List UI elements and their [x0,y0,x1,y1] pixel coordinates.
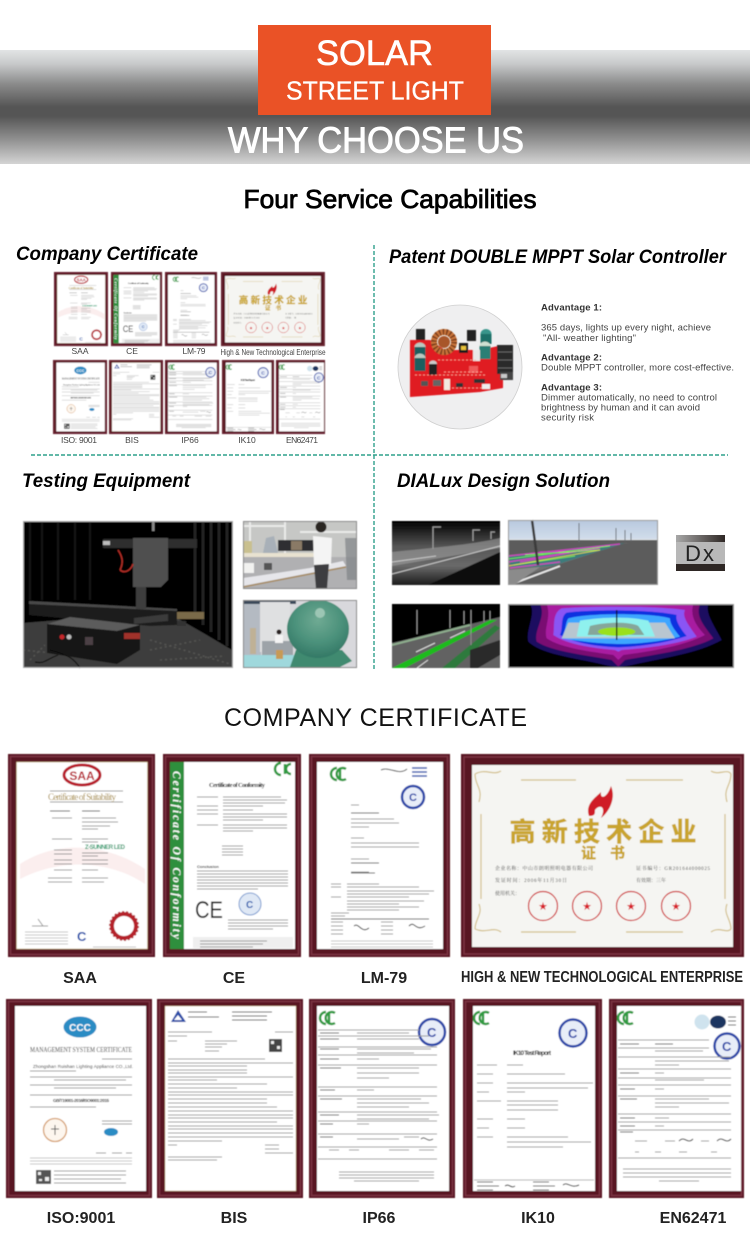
thumbnail: IK10 [222,360,274,434]
certificate: IP66 [309,999,455,1198]
certificate: SAA: Certificate of Suitability [48,792,116,802]
label row one: SAA [63,970,97,987]
label row two: EN62471 [660,1210,726,1227]
certificate: SAA: C [77,929,87,944]
thumbnail captions: EN62471 [286,435,318,445]
certificate: LM-79 [309,754,450,957]
heading: testing equipment: Testing Equipment [22,471,191,492]
advantage 1 [541,302,711,344]
certificate: ISO 9001: MANAGEMENT SYSTEM CERTIFICATE [30,1046,132,1054]
certificate: ISO 9001: Zhongshan Ruishan Lighting Appliance CO.,Ltd. [33,1064,133,1069]
heading: company certificate section: COMPANY CERTIFICATE [224,704,527,732]
thumbnail captions: ISO: 9001 [61,435,97,445]
certificate: high and new technological enterprise: 企业名称：中山市朗明照明电器有限公司 [495,865,593,872]
quadrant dividers [31,245,728,670]
certificate: SAA [8,754,155,957]
icon: red circuit board [410,329,513,397]
certificate: IK10 [463,999,602,1198]
advantage 3 [541,382,717,424]
heading: why choose us: WHY CHOOSE US [228,120,524,160]
certificate: BIS [157,999,303,1198]
label row one [63,969,743,987]
photo: goniophotometer [23,521,233,668]
thumbnail captions: SAA [71,346,89,356]
thumbnail captions: LM-79 [182,346,206,356]
heading: four service capabilities: Four Service Capabilities [244,184,536,214]
DIALux rendering: grey road [392,521,500,585]
thumbnail captions: IP66 [181,435,199,445]
certificate: ISO 9001: CCC [69,1023,91,1034]
icon: Dx logo: Dx [685,541,714,566]
thumbnail captions: CE [126,346,138,356]
label row two: ISO:9001 [47,1210,115,1227]
certificate: high and new technological enterprise: ★ [626,902,636,912]
certificate: EN62471 [609,999,744,1198]
certificate: high and new technological enterprise [461,754,744,957]
certificate: high and new technological enterprise: ★ [582,902,592,912]
certificate: CE: Conclusion [197,864,219,869]
icon: Dx logo [676,535,725,571]
advantage 1: "All- weather lighting" [543,333,636,344]
certificate: high and new technological enterprise: ★ [538,902,548,912]
certificate: IK10: C [568,1026,578,1041]
thumbnail captions: High & New Technological Enterprise [220,347,326,357]
heading: dialux: DIALux Design Solution [397,471,610,492]
label row one: LM-79 [361,970,407,987]
orange title box [258,25,491,115]
certificate: SAA: Z-SUNNER LED [85,845,126,851]
certificate: high and new technological enterprise: ★ [671,902,681,912]
advantage 2: Advantage 2: [541,352,602,364]
thumbnail: high and new technological enterprise [221,272,325,346]
thumbnail: CE [111,272,162,346]
thumbnail: ISO 9001 [53,360,107,434]
label row two: BIS [221,1210,248,1227]
thumbnail: LM-79 [165,272,217,346]
certificate: CE: C [246,900,253,911]
thumbnail captions: IK10 [238,435,256,445]
certificate: high and new technological enterprise: 证书编号：GR201644000025 [636,865,710,872]
advantage 3: security risk [541,412,594,424]
backdrop circle [398,305,522,429]
advantage 3: brightness by human and it can avoid [541,402,700,414]
certificate: CE: CE [195,897,223,924]
certificate: ISO 9001 [6,999,152,1198]
certificate: CE: Certificate of Conformity [209,782,266,789]
advantage 3: Advantage 3: [541,382,602,394]
certificate: ISO 9001: GB/T19001-2016/ISO9001:2015 [53,1098,109,1103]
thumbnail: EN62471 [276,360,325,434]
controller illustration [398,305,522,429]
certificate: CE: Certificate Of Conformity [170,771,182,940]
thumbnail: SAA [54,272,108,346]
certificate: high and new technological enterprise: 使用机关： [495,890,520,897]
advantage 2 [541,352,734,374]
certificate: high and new technological enterprise: 有效期：三年 [636,877,666,884]
label row two: IK10 [521,1210,555,1227]
heading: patent controller: Patent DOUBLE MPPT Solar Controller [389,247,728,268]
advantage 3: Dimmer automatically, no need to control [541,392,717,404]
certificate: high and new technological enterprise: 发证时间：2006年11月30日 [495,877,567,884]
certificate: IP66: C [427,1025,437,1040]
label row two [47,1210,726,1227]
heading: company certificate: Company Certificate [16,244,198,265]
photo: lab technician [243,521,357,589]
advantage 1: 365 days, lights up every night, achieve [541,322,711,334]
DIALux rendering: isolux contour plot [508,604,734,668]
advantage 1: Advantage 1: [541,302,602,314]
DIALux rendering: false-colour street view [508,520,658,585]
label row one: CE [223,970,245,987]
certificate: IK10: IK10 Test Report [513,1050,552,1057]
certificate: high and new technological enterprise: 高新技术企业 [510,817,696,847]
thumbnail gallery: company certificates [53,272,325,434]
certificate: SAA: SAA [69,769,95,783]
thumbnail captions: BIS [125,435,139,445]
photo: integrating sphere [243,600,357,668]
certificate: EN62471: C [722,1039,732,1054]
thumbnail: IP66 [165,360,219,434]
thumbnail captions [61,346,326,445]
certificate: LM-79: C [409,792,417,804]
label row two: IP66 [363,1210,396,1227]
title: solar: SOLAR [316,34,433,73]
advantage 2: Double MPPT controller, more cost-effective. [541,362,734,374]
subtitle: street light: STREET LIGHT [286,76,464,106]
thumbnail: BIS [109,360,163,434]
header band [0,25,750,164]
certificate: high and new technological enterprise: 证书 [581,845,625,862]
DIALux rendering: green road [392,604,500,668]
certificate: CE [163,754,301,957]
advantages text [541,302,734,424]
